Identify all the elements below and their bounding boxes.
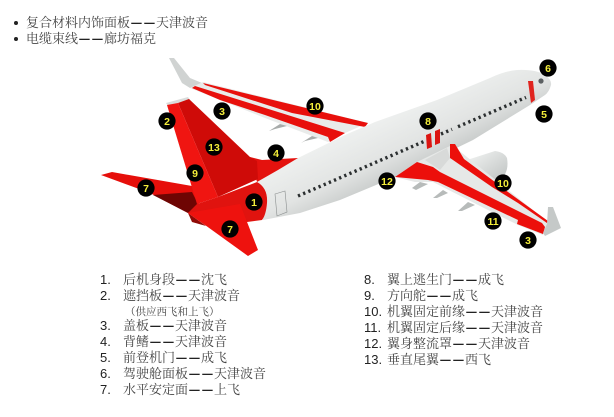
badge 9: 9 [192,168,198,180]
under tail shadow [188,213,206,226]
bullet: interior panels: 复合材料内饰面板 天津波音 [26,15,208,30]
item 3: — [163,318,174,333]
badge 2 [158,112,176,130]
leading edge red, item 10 [450,144,548,223]
badge 4: 4 [273,148,279,160]
item 2: 遮挡板 天津波音 [123,288,240,303]
item 5: — [176,350,187,365]
number badges [137,59,557,249]
badge 9 [186,164,204,182]
far stabilizer shadow [153,192,198,213]
item 6: — [202,366,213,381]
legend left column: 1. [100,272,111,287]
badge 3 far wing: 3 [219,106,225,118]
passenger windows [298,97,526,196]
near flap fairings [412,182,428,190]
badge 11 [484,212,502,230]
far leading edge red [203,83,368,127]
badge 10 far wing [306,97,324,115]
overwing exit doors, item 8 [426,129,440,149]
far wing [169,58,368,143]
item 9: — [427,288,438,303]
badge 11: 11 [487,216,499,228]
rear door outline [275,191,287,216]
bullet: cable harness: 电缆束线 廊坊福克 [26,31,156,46]
bullet: interior panels: — [131,15,142,30]
near engine [467,151,508,180]
item 3: — [150,318,161,333]
legend right column: 11. [364,320,381,335]
badge 1 [245,193,263,211]
dorsal fin, item 4 [250,157,298,182]
fin tip [166,97,190,106]
badge 12 [378,172,396,190]
item 6: — [189,366,200,381]
item 8: — [453,272,464,287]
item 5: 前登机门 成飞 [123,350,227,365]
legend right column: 8. [364,272,375,287]
badge 13 [205,138,223,156]
badge 10 far wing: 10 [309,101,321,113]
legend left column: 7. [100,382,111,397]
badge 13: 13 [208,142,220,154]
item 1: 后机身段 沈飞 [123,272,227,287]
badge 8: 8 [425,116,431,128]
badge 3 near wing [519,231,537,249]
badge 7 far stabilizer [137,179,155,197]
item 2: — [163,288,174,303]
badge 8 [419,112,437,130]
far horizontal stabilizer [101,172,199,213]
item 9: — [440,288,451,303]
item 7: 水平安定面 上飞 [123,382,240,397]
item 1: — [189,272,200,287]
badge 5 [535,105,553,123]
badge 7 near stabilizer: 7 [227,224,233,236]
badge 4 [267,144,285,162]
item 12: — [466,336,477,351]
legend right column [364,272,543,367]
bullet: cable harness: — [92,31,103,46]
legend left column [100,272,266,397]
near winglet [543,207,561,236]
item 7: — [202,382,213,397]
far trailing edge red [192,86,345,142]
near horizontal stabilizer [188,204,258,256]
item 1: — [176,272,187,287]
badge 3 near wing: 3 [525,235,531,247]
item 8: 翼上逃生门 成飞 [387,272,504,287]
item 13: — [440,352,451,367]
item 12: — [453,336,464,351]
near wing [395,144,561,236]
badge 3 far wing [213,102,231,120]
nose door red [528,81,535,103]
legend right column: 10. [364,304,382,319]
far wing surface [190,82,368,142]
item 13: 垂直尾翼 西飞 [387,352,491,367]
item 12: 翼身整流罩 天津波音 [387,336,530,351]
root panel marks [425,148,450,170]
item 7: — [189,382,200,397]
legend left column: 3. [100,318,111,333]
legend left column: 4. [100,334,111,349]
legend right column: 12. [364,336,382,351]
badge 6: 6 [545,63,551,75]
trailing edge and fairing red, items 11 and 12 [395,162,545,234]
badge 1: 1 [251,197,257,209]
item 6: 驾驶舱面板 天津波音 [123,366,266,381]
badge 10 near wing [494,174,512,192]
item 9: 方向舵 成飞 [387,288,478,303]
badge 10 near wing: 10 [497,178,509,190]
item 10: 机翼固定前缘 天津波音 [387,304,543,319]
item 3: 盖板 天津波音 [123,318,227,333]
item 11: 机翼固定后缘 天津波音 [387,320,543,335]
item 5: — [189,350,200,365]
item 2: — [176,288,187,303]
item 13: — [453,352,464,367]
cockpit window [538,78,544,84]
vertical fin, item 13 [178,99,258,197]
item 4: — [150,334,161,349]
tail [101,97,298,256]
top bullet list [14,15,208,46]
item 2 note: （供应西飞和上飞） [125,307,220,318]
item 8: — [466,272,477,287]
item 11: — [466,320,477,335]
legend left column: 5. [100,350,111,365]
item 10: — [466,304,477,319]
item 4: — [163,334,174,349]
tail cone, item 1 [188,182,267,225]
bullet: interior panels: — [144,15,155,30]
badge 7 near stabilizer [221,220,239,238]
badge 6 [539,59,557,77]
bullet: cable harness: — [79,31,90,46]
far winglet [169,58,202,88]
legend left column: 6. [100,366,111,381]
item 10: — [479,304,490,319]
legend right column: 9. [364,288,375,303]
badge 5: 5 [541,109,547,121]
item 11: — [479,320,490,335]
badge 2: 2 [164,116,170,128]
rudder, item 9 [167,103,218,204]
fuselage [257,70,551,220]
legend right column: 13. [364,352,382,367]
badge 12: 12 [381,176,393,188]
legend left column: 2. [100,288,111,303]
badge 7 far stabilizer: 7 [143,183,149,195]
wing surface [395,145,548,235]
far flap fairings [269,124,287,131]
item 4: 背鳍 天津波音 [123,334,227,349]
